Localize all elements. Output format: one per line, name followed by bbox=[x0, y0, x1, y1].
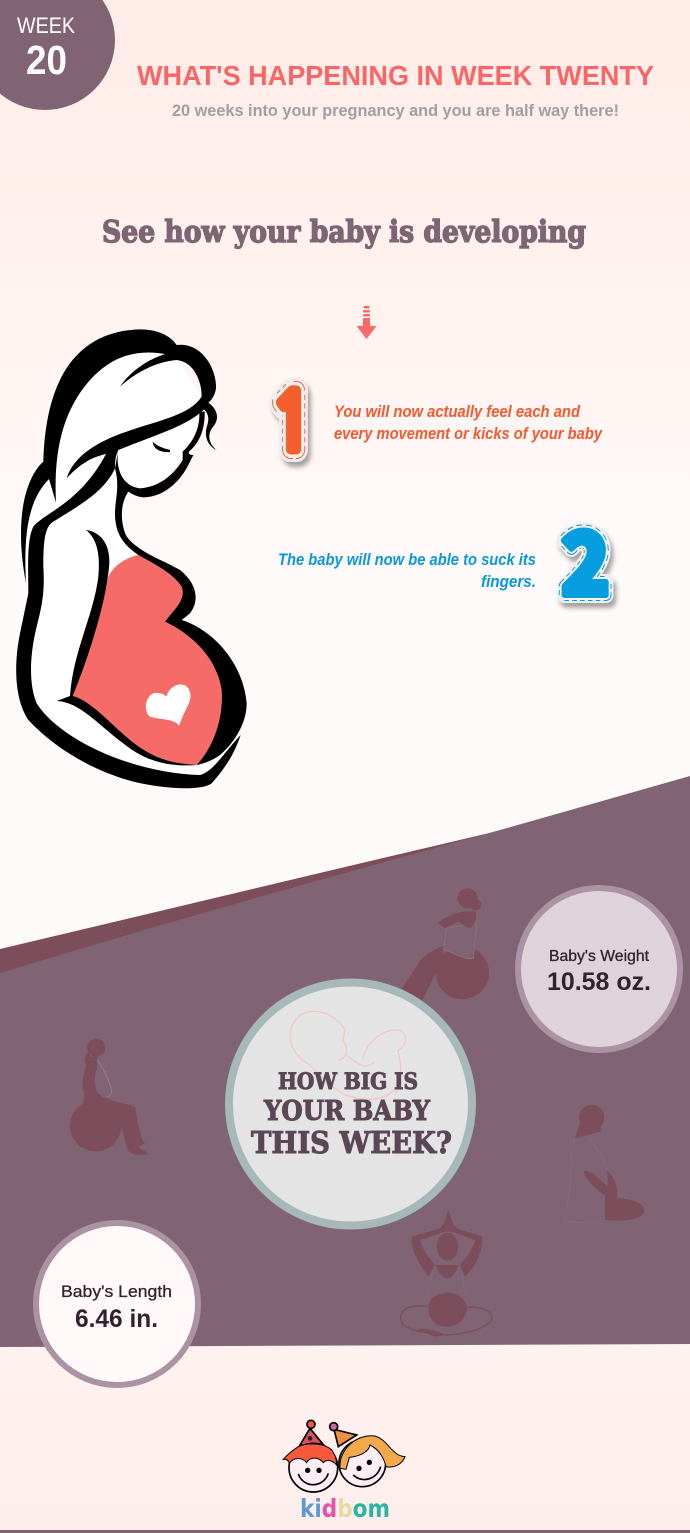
center circle heading: YOUR BABY bbox=[263, 1096, 431, 1127]
arrow bbox=[356, 306, 376, 339]
icon: baby outlines bbox=[290, 1011, 406, 1099]
fact 2 text bbox=[278, 550, 536, 591]
logo: kidbom bbox=[283, 1420, 405, 1523]
panel: baby size bbox=[0, 776, 690, 1385]
silhouette: woman in yoga pose, bottom bbox=[400, 1210, 492, 1337]
subtitle: 20 weeks into your pregnancy and you are half way there! bbox=[172, 101, 619, 120]
icon: sticker number 1: 1 bbox=[271, 384, 313, 462]
silhouette: kneeling woman, right bbox=[563, 1105, 644, 1224]
icon: sticker number 2: 2 bbox=[561, 495, 610, 621]
fact 2 text: fingers. bbox=[481, 572, 536, 591]
silhouette: woman sitting on ball, left bbox=[70, 1039, 148, 1155]
length circle: Baby's Length bbox=[61, 1282, 172, 1301]
icon: sticker number 2: 2 bbox=[561, 495, 610, 621]
fact 1 text: every movement or kicks of your baby bbox=[334, 424, 603, 443]
section heading: See how your baby is developing bbox=[102, 215, 586, 250]
center circle heading bbox=[251, 1069, 452, 1161]
length circle: 6.46 in. bbox=[75, 1305, 158, 1333]
icon: sticker number 1: 1 bbox=[271, 384, 313, 462]
fact 1 text bbox=[334, 402, 603, 443]
icon: sticker number 2: 2 bbox=[561, 495, 610, 621]
fact 1 text: You will now actually feel each and bbox=[334, 402, 581, 421]
center circle heading: HOW BIG IS bbox=[278, 1069, 418, 1095]
week badge bbox=[0, 0, 115, 110]
center circle bbox=[229, 982, 472, 1226]
fact 1 bbox=[271, 384, 603, 462]
icon: sticker number 1: 1 bbox=[271, 384, 313, 462]
length circle bbox=[36, 1223, 198, 1385]
icon: sticker number 2: 2 bbox=[561, 495, 610, 621]
icon: sticker number 1: 1 bbox=[271, 384, 313, 462]
icon: two children faces bbox=[283, 1420, 405, 1492]
fact 2 bbox=[278, 495, 610, 621]
week badge: 20 bbox=[26, 37, 67, 83]
weight circle: 10.58 oz. bbox=[547, 968, 651, 996]
center circle heading: THIS WEEK? bbox=[251, 1126, 452, 1161]
week badge: WEEK bbox=[17, 13, 75, 38]
logo wordmark: kidbom bbox=[300, 1494, 390, 1523]
rose wedge behind panel bbox=[0, 827, 515, 975]
weight circle bbox=[518, 888, 680, 1050]
pregnant woman illustration bbox=[16, 329, 247, 788]
silhouette: woman on ball, top bbox=[402, 888, 489, 1002]
fact 2 text: The baby will now be able to suck its bbox=[278, 550, 536, 569]
weight circle: Baby's Weight bbox=[549, 948, 650, 965]
title: WHAT'S HAPPENING IN WEEK TWENTY bbox=[137, 60, 654, 91]
